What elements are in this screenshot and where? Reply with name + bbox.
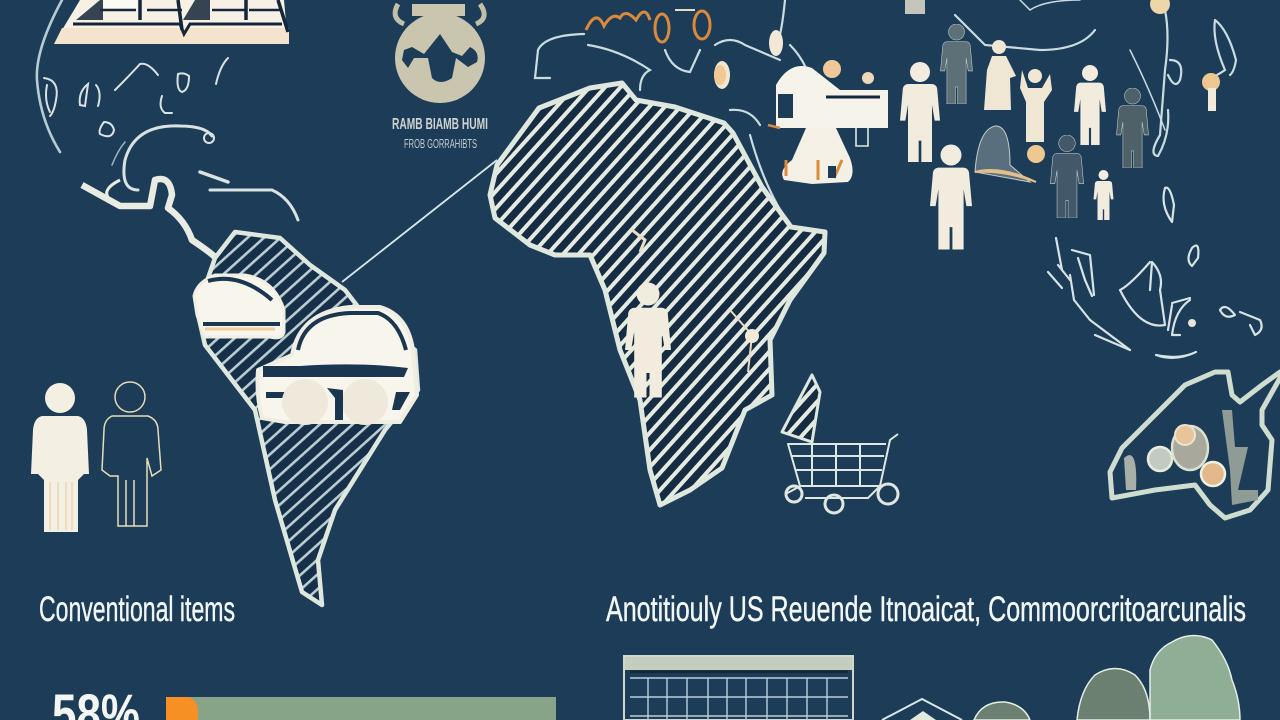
heading: left: Conventional items	[39, 590, 235, 629]
icon: house	[882, 699, 962, 720]
trees	[974, 635, 1240, 720]
person outline	[102, 382, 161, 526]
icon: shopping cart	[785, 434, 898, 513]
icon: desk machine with people	[768, 60, 888, 184]
person pair lower left	[31, 382, 161, 532]
figure in dress	[984, 40, 1016, 110]
map: australia	[1110, 372, 1280, 518]
icon: solar panel grid	[624, 656, 853, 720]
central america isthmus	[82, 179, 216, 258]
top left map fragments	[37, 0, 298, 220]
asian islands	[1048, 188, 1262, 358]
pot label text: RAMB BIAMB HUMI	[392, 116, 488, 133]
figure with raised arm	[1020, 69, 1052, 142]
island: madagascar	[782, 375, 820, 442]
icon: large vehicle	[258, 307, 417, 425]
person on africa	[625, 282, 671, 398]
small dots along the coast	[714, 0, 1220, 111]
person filled	[31, 383, 89, 532]
connector line	[342, 160, 497, 282]
map: africa	[490, 83, 825, 505]
small dot	[1188, 319, 1196, 327]
pot label text	[392, 116, 488, 151]
icon: small vehicle	[194, 275, 284, 338]
icon: building top left	[54, 0, 289, 44]
progress bar	[166, 697, 556, 720]
map: south america	[197, 232, 418, 605]
group of people	[900, 0, 1148, 250]
coins	[1148, 425, 1225, 486]
icon: cream pot with label	[392, 4, 488, 151]
orange and grey central figure	[975, 126, 1030, 182]
pot label text: FROB GORRAHIBTS	[404, 136, 477, 151]
north africa and middle east coastline	[535, 0, 1236, 225]
orange squiggle top center	[586, 10, 710, 42]
